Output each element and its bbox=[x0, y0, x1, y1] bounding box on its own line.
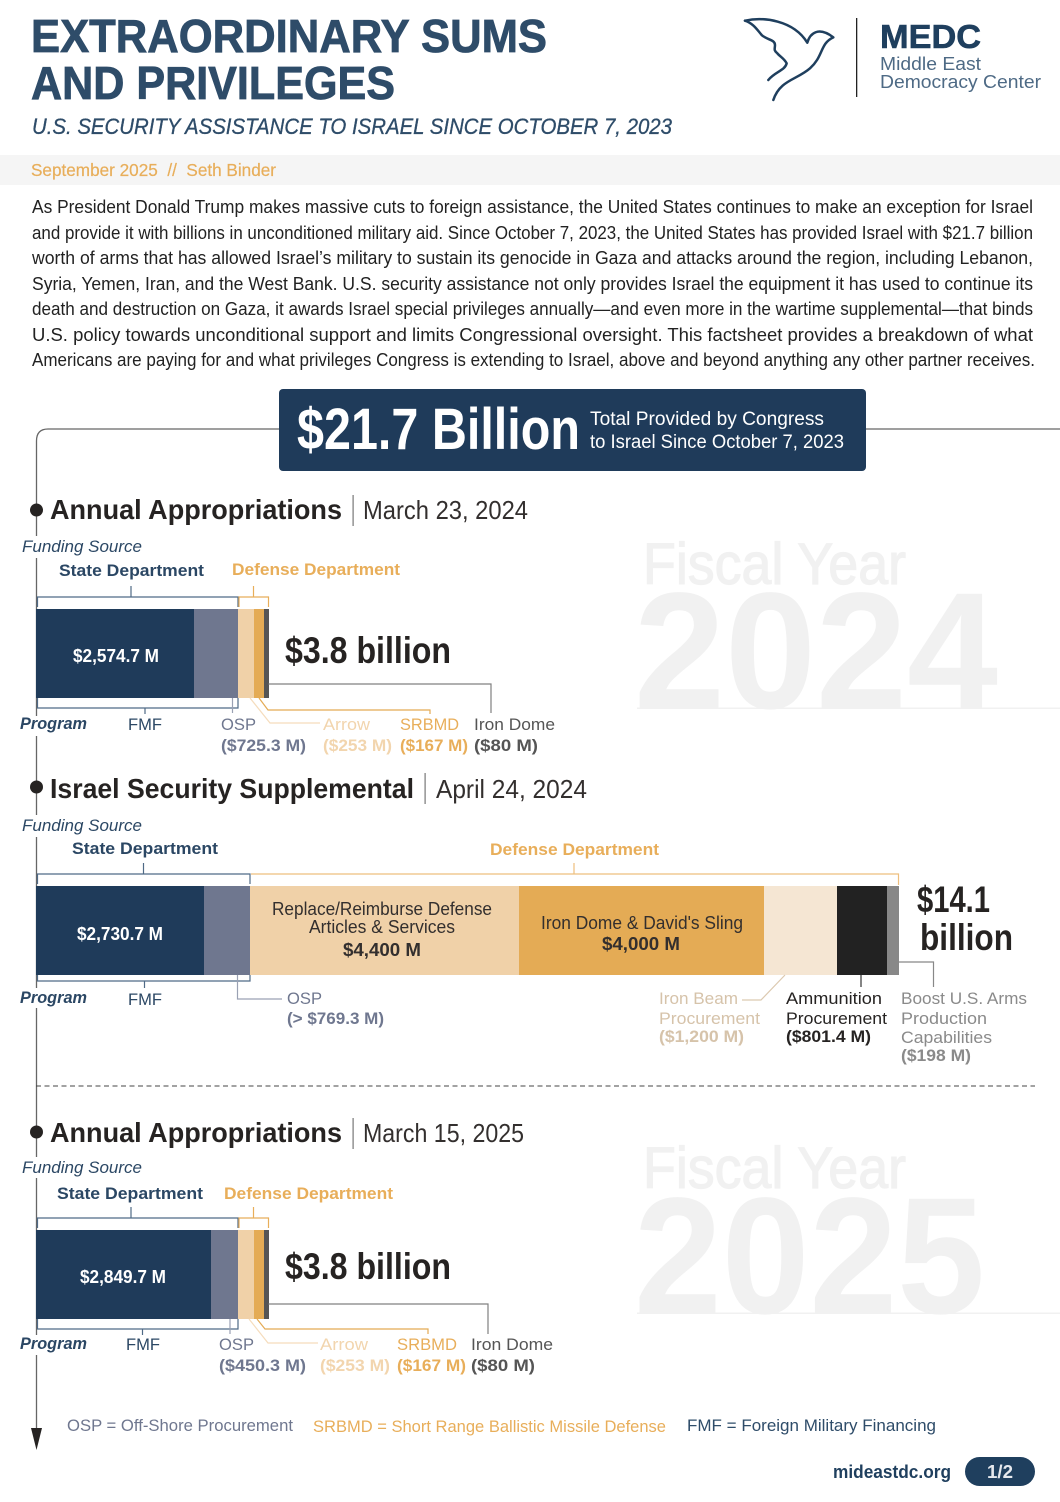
program labels: ($167 M) bbox=[400, 736, 468, 755]
heading bbox=[30, 494, 528, 526]
stacked bar: $2,574.7 M bbox=[73, 646, 159, 666]
stacked bar: Articles & Services bbox=[309, 917, 455, 937]
program labels: (> $769.3 M) bbox=[287, 1009, 384, 1028]
funding source labels: State Department bbox=[59, 561, 204, 580]
funding source labels: Defense Department bbox=[232, 560, 400, 579]
title bbox=[31, 10, 547, 109]
total callout: to Israel Since October 7, 2023 bbox=[590, 432, 844, 453]
footer: website and page number: mideastdc.org bbox=[833, 1462, 951, 1482]
total bbox=[917, 879, 1013, 958]
total: $3.8 billion bbox=[285, 1246, 451, 1287]
stacked bar bbox=[36, 886, 899, 975]
total: billion bbox=[920, 917, 1013, 958]
program labels bbox=[20, 1334, 553, 1375]
total callout: Total Provided by Congress bbox=[590, 409, 824, 430]
funding source labels bbox=[22, 1158, 393, 1203]
logo: MEDC: Middle East bbox=[880, 54, 981, 74]
program labels: FMF bbox=[128, 715, 162, 734]
stacked bar bbox=[36, 609, 269, 698]
total: $14.1 bbox=[917, 879, 990, 920]
program labels: OSP bbox=[219, 1335, 254, 1354]
program labels: Arrow bbox=[320, 1335, 369, 1354]
heading: March 23, 2024 bbox=[363, 495, 528, 525]
icon: dove bbox=[745, 19, 833, 100]
heading: March 15, 2025 bbox=[363, 1118, 524, 1148]
stacked bar: $2,849.7 M bbox=[80, 1267, 166, 1287]
funding source labels: Funding Source bbox=[22, 1158, 142, 1177]
stacked bar: Replace/Reimburse Defense bbox=[272, 899, 492, 919]
total callout bbox=[279, 389, 866, 471]
intro paragraph: death and destruction on Gaza, it awards Israel special privileges annually—and even more in the wartime supplemental—that binds bbox=[32, 299, 1033, 319]
heading: Annual Appropriations bbox=[50, 1117, 342, 1148]
program labels: Program bbox=[20, 988, 87, 1007]
total callout: $21.7 Billion bbox=[297, 397, 580, 462]
program labels: OSP bbox=[287, 989, 322, 1008]
subtitle: U.S. SECURITY ASSISTANCE TO ISRAEL SINCE OCTOBER 7, 2023 bbox=[32, 114, 673, 139]
program labels: Capabilities bbox=[901, 1028, 992, 1047]
program labels: ($167 M) bbox=[397, 1356, 466, 1375]
logo: MEDC: Democracy Center bbox=[880, 72, 1041, 92]
connector lines bbox=[38, 684, 491, 723]
funding source labels: Funding Source bbox=[22, 537, 142, 556]
abbreviation legend: OSP = Off-Shore Procurement bbox=[67, 1416, 293, 1435]
connector lines bbox=[38, 1304, 488, 1343]
program labels: Iron Dome bbox=[474, 715, 555, 734]
program labels: Iron Beam bbox=[659, 989, 738, 1008]
program labels: SRBMD bbox=[400, 715, 459, 734]
program labels: Arrow bbox=[323, 715, 371, 734]
program labels: Program bbox=[20, 1334, 87, 1353]
program labels: Procurement bbox=[659, 1009, 760, 1028]
funding source labels bbox=[22, 816, 659, 859]
program labels: ($1,200 M) bbox=[659, 1027, 744, 1046]
funding source labels bbox=[22, 537, 400, 580]
program labels bbox=[20, 714, 555, 755]
funding source labels: Defense Department bbox=[490, 840, 659, 859]
intro paragraph: U.S. policy towards unconditional support and limits Congressional oversight. This factsheet provides a breakdown of what bbox=[32, 325, 1033, 345]
funding brackets bbox=[38, 1207, 268, 1228]
date and author band bbox=[0, 155, 1060, 185]
footer: website and page number: 1/2 bbox=[987, 1462, 1013, 1482]
panel: annual appropriations 2024 bbox=[20, 494, 555, 755]
stacked bar: Iron Dome & David's Sling bbox=[541, 913, 743, 933]
funding brackets bbox=[38, 586, 268, 607]
program labels: ($253 M) bbox=[323, 736, 392, 755]
watermark: fiscal year 2024: 2024 bbox=[634, 559, 998, 744]
stacked bar: $4,000 M bbox=[602, 934, 680, 954]
heading bbox=[30, 773, 587, 804]
funding source labels: Defense Department bbox=[224, 1184, 393, 1203]
program labels: Iron Dome bbox=[471, 1335, 553, 1354]
timeline arrow bbox=[20, 429, 1060, 1450]
watermark: fiscal year 2025: 2025 bbox=[634, 1164, 985, 1349]
heading bbox=[30, 1117, 524, 1149]
title: AND PRIVILEGES bbox=[31, 57, 395, 109]
date and author band: September 2025 // Seth Binder bbox=[31, 160, 276, 180]
program labels: FMF bbox=[128, 990, 162, 1009]
watermark: fiscal year 2024: Fiscal Year bbox=[643, 532, 906, 597]
funding source labels: Funding Source bbox=[22, 816, 142, 835]
program labels: OSP bbox=[221, 715, 256, 734]
program labels: FMF bbox=[126, 1335, 160, 1354]
connector lines bbox=[38, 962, 934, 1000]
funding source labels: State Department bbox=[57, 1184, 203, 1203]
heading: Annual Appropriations bbox=[50, 494, 342, 525]
program labels: ($450.3 M) bbox=[219, 1356, 306, 1375]
program labels: ($80 M) bbox=[471, 1356, 535, 1375]
program labels: ($80 M) bbox=[474, 736, 538, 755]
funding brackets bbox=[38, 863, 898, 885]
stacked bar: $4,400 M bbox=[343, 940, 421, 960]
panel: israel security supplemental bbox=[20, 773, 1027, 1065]
watermark: fiscal year 2025: Fiscal Year bbox=[643, 1136, 906, 1201]
stacked bar bbox=[36, 1230, 269, 1319]
program labels: ($725.3 M) bbox=[221, 736, 306, 755]
footer: website and page number bbox=[833, 1457, 1035, 1486]
heading: April 24, 2024 bbox=[436, 774, 587, 804]
program labels: Boost U.S. Arms bbox=[901, 989, 1027, 1008]
program labels: Ammunition bbox=[786, 989, 882, 1008]
intro paragraph bbox=[31, 197, 1035, 370]
logo: MEDC bbox=[745, 18, 1041, 100]
title: EXTRAORDINARY SUMS bbox=[31, 10, 547, 62]
intro paragraph: worth of arms that has allowed Israel’s military to sustain its genocide in Gaza and attacks around the region, including Lebanon, bbox=[31, 248, 1033, 268]
total: $3.8 billion bbox=[285, 630, 451, 671]
program labels: SRBMD bbox=[397, 1335, 457, 1354]
abbreviation legend bbox=[67, 1416, 936, 1436]
program labels: ($801.4 M) bbox=[786, 1027, 871, 1046]
abbreviation legend: SRBMD = Short Range Ballistic Missile Defense bbox=[313, 1417, 666, 1436]
program labels: Procurement bbox=[786, 1009, 887, 1028]
heading: Israel Security Supplemental bbox=[50, 773, 414, 804]
program labels: Program bbox=[20, 714, 87, 733]
program labels: ($198 M) bbox=[901, 1046, 971, 1065]
funding source labels: State Department bbox=[72, 839, 218, 858]
intro paragraph: As President Donald Trump makes massive cuts to foreign assistance, the United States continues to make an exception for Israel bbox=[32, 197, 1033, 217]
program labels bbox=[20, 988, 1027, 1065]
panel: annual appropriations 2025 bbox=[20, 1117, 553, 1375]
abbreviation legend: FMF = Foreign Military Financing bbox=[687, 1416, 936, 1435]
stacked bar: $2,730.7 M bbox=[77, 924, 163, 944]
program labels: Production bbox=[901, 1009, 987, 1028]
logo: MEDC: MEDC bbox=[880, 18, 981, 55]
program labels: ($253 M) bbox=[320, 1356, 390, 1375]
intro paragraph: Syria, Yemen, Iran, and the West Bank. U.S. security assistance not only provides Israel the equipment it has used to continue its bbox=[32, 274, 1033, 294]
